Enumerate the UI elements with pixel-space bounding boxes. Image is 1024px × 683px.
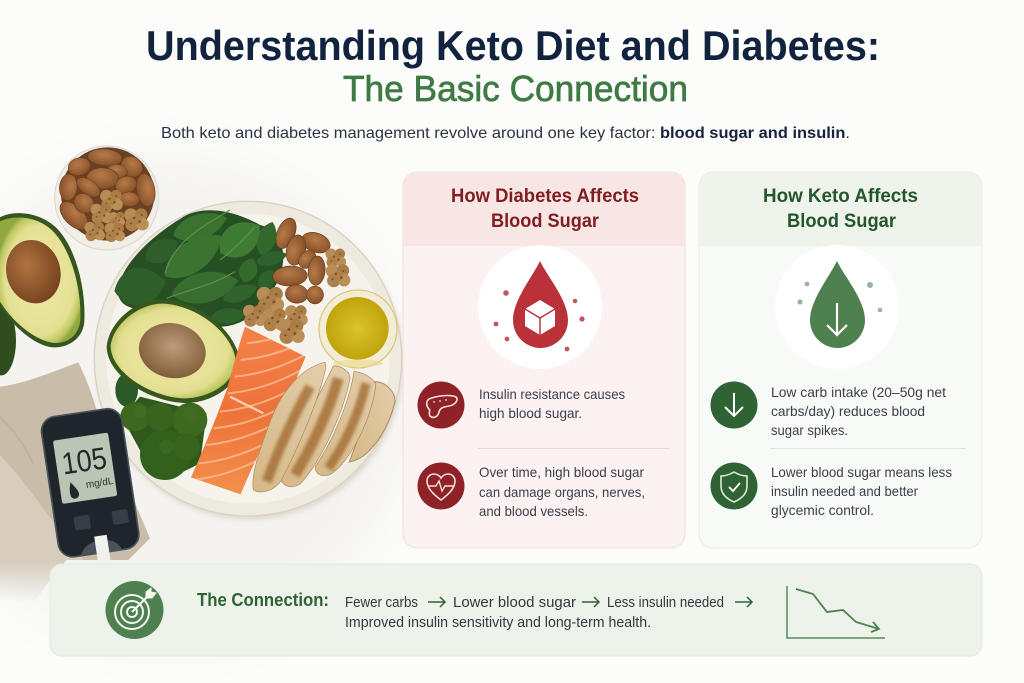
icon: chicken slices: [253, 362, 395, 492]
icon: salmon: [191, 323, 314, 494]
text: connection flow: [345, 595, 752, 631]
icon: down arrow badge: [710, 382, 758, 428]
panel: how diabetes affects blood sugar: [403, 172, 685, 548]
text: low carb: [771, 384, 946, 438]
food photo illustration: [0, 146, 404, 603]
panel: how keto affects blood sugar: [699, 172, 982, 548]
title: The Basic Connection: [343, 68, 688, 109]
icon: shield check: [710, 462, 758, 510]
heading: How Keto Affects: [763, 186, 918, 207]
chart: falling trend line: [787, 586, 885, 638]
title: Understanding Keto Diet and Diabetes:: [146, 22, 880, 69]
heading: Blood Sugar: [491, 211, 600, 232]
heading: [451, 186, 639, 232]
heading: How Diabetes Affects: [451, 186, 639, 207]
text: lower blood sugar: Lower blood sugar means less: [771, 464, 952, 480]
heading: the connection: The Connection:: [197, 590, 329, 610]
text: over time: [479, 464, 645, 519]
text: over time: Over time, high blood sugar: [479, 464, 644, 480]
text: connection flow: Lower blood sugar: [453, 595, 576, 611]
text: connection flow: Less insulin needed: [607, 595, 724, 611]
text: over time: and blood vessels.: [479, 503, 588, 519]
title: [146, 22, 880, 109]
text: lower blood sugar: [771, 464, 952, 518]
icon: olive oil cup: [319, 290, 397, 368]
icon: pancreas: [418, 382, 464, 428]
icon: avocado half left: [0, 213, 84, 375]
text: over time: can damage organs, nerves,: [479, 484, 645, 500]
subtitle: Both keto and diabetes management revolve around one key factor: blood sugar and insulin .: [161, 125, 850, 142]
icon: heart with pulse: [418, 462, 464, 510]
text: lower blood sugar: insulin needed and better: [771, 483, 918, 499]
text: connection flow: Improved insulin sensitivity and long-term health.: [345, 615, 651, 631]
icon: glucose meter: 105: [59, 441, 109, 481]
icon: spinach: [111, 206, 289, 407]
text: insulin resistance: high blood sugar.: [479, 405, 582, 421]
text: low carb: carbs/day) reduces blood: [771, 403, 925, 419]
text: connection flow: Fewer carbs: [345, 595, 418, 611]
panel header: [403, 172, 685, 246]
panel header: [699, 172, 982, 246]
napkin: [0, 362, 150, 603]
icon: glucose meter: [39, 407, 144, 578]
text: low carb: Low carb intake (20–50g net: [771, 384, 946, 400]
icon: nuts on plate: [243, 215, 350, 344]
heading: [763, 186, 918, 232]
icon: target: [106, 581, 164, 639]
icon: drop with down arrow: [775, 245, 899, 369]
text: insulin resistance: [479, 386, 625, 421]
heading: Blood Sugar: [787, 211, 897, 232]
icon: avocado half on plate: [107, 299, 240, 403]
icon: broccoli: [120, 397, 207, 480]
icon: blood drop with sugar cube: [478, 245, 602, 369]
text: lower blood sugar: glycemic control.: [771, 502, 874, 518]
panel: the connection: [50, 564, 982, 656]
icon: plate: [94, 201, 404, 520]
icon: glucose meter: mg/dL: [85, 476, 115, 491]
text: insulin resistance: Insulin resistance causes: [479, 386, 625, 402]
icon: nut bowl: [55, 146, 159, 250]
text: low carb: sugar spikes.: [771, 422, 848, 438]
